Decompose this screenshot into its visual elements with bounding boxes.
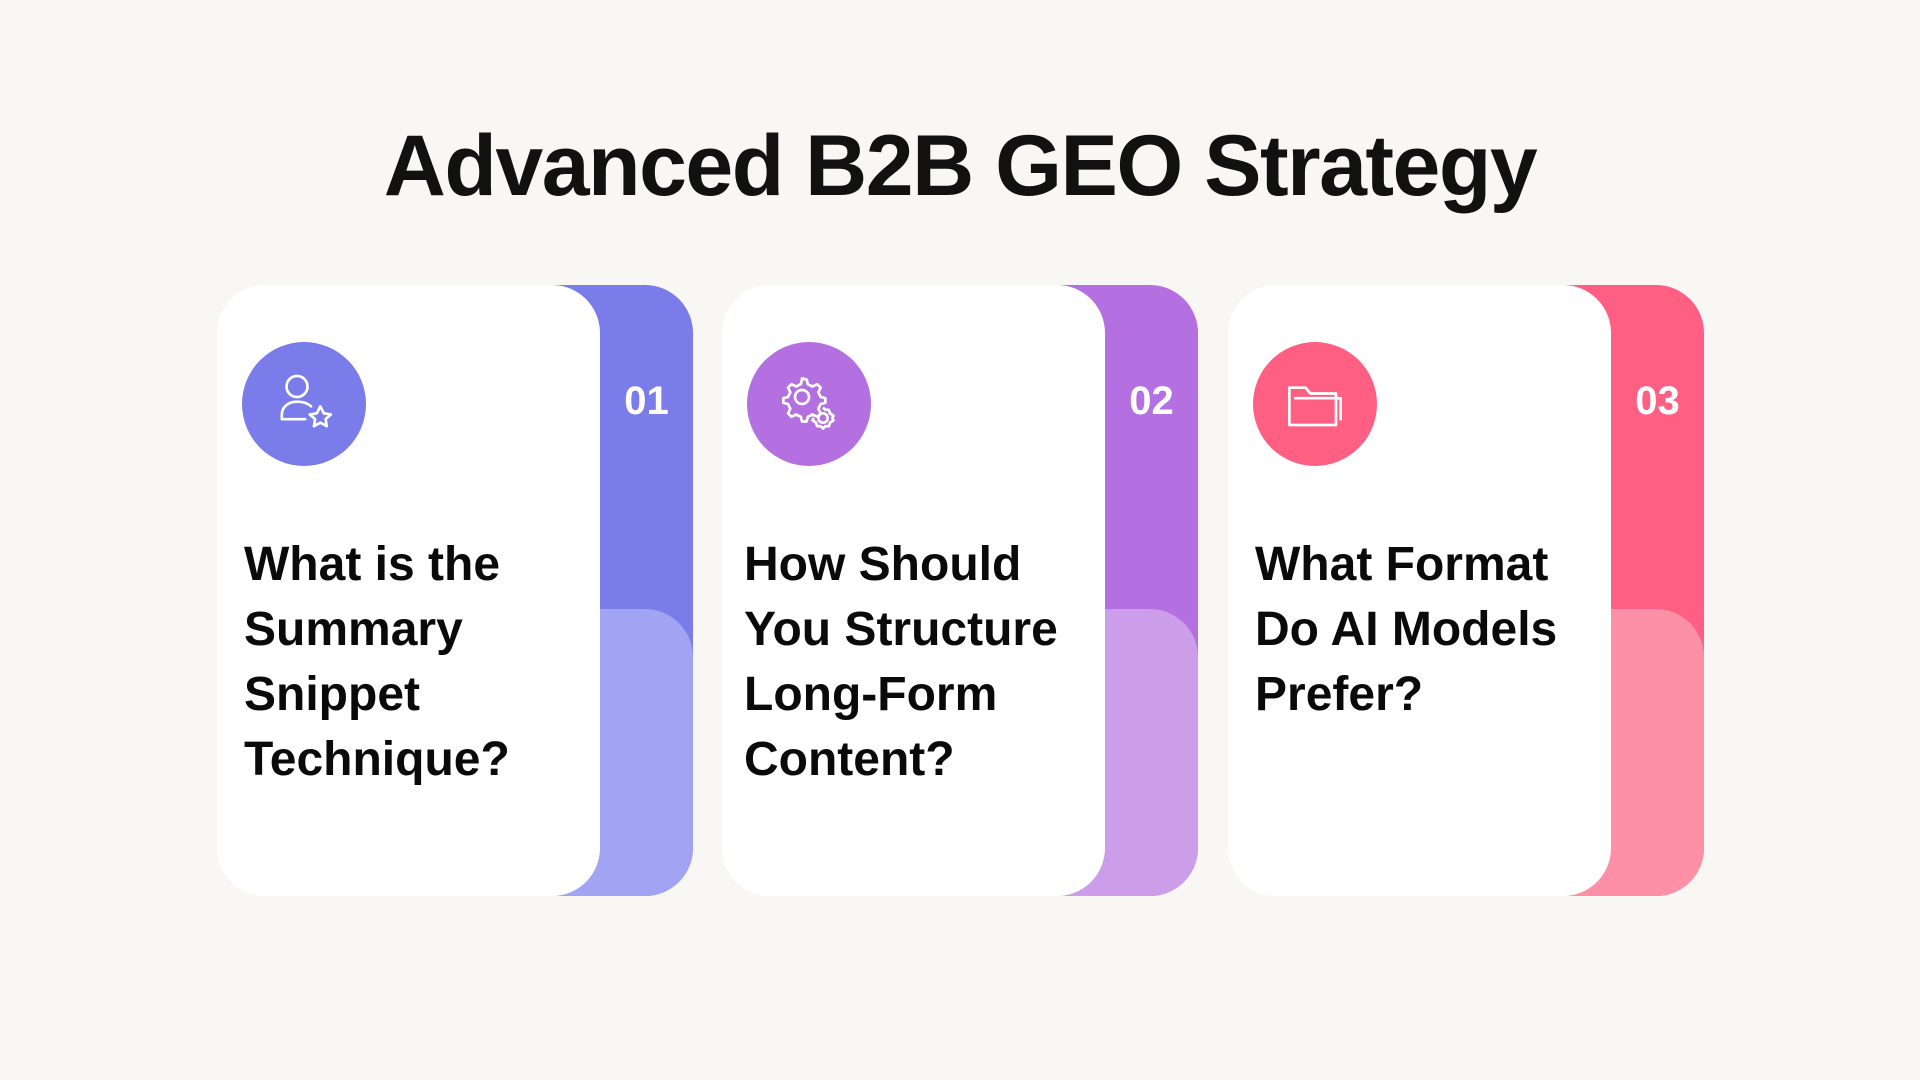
text: question 2: Content? xyxy=(744,733,955,786)
number 03: 03 xyxy=(1635,379,1680,423)
text: question 3: Do AI Models xyxy=(1255,603,1557,656)
text: question 2: How Should xyxy=(744,538,1021,591)
panel: card 01 xyxy=(217,285,693,896)
number 01: 01 xyxy=(624,379,669,423)
text: question 2: Long-Form xyxy=(744,668,997,721)
icon: folder xyxy=(1253,342,1377,466)
text: question 2 xyxy=(744,538,1058,786)
title: Advanced B2B GEO Strategy xyxy=(384,118,1536,214)
icon: user star xyxy=(242,342,366,466)
text: question 1: Summary xyxy=(244,603,463,656)
panel: card 02 xyxy=(722,285,1198,896)
text: question 2: You Structure xyxy=(744,603,1058,656)
text: question 3 xyxy=(1255,538,1557,721)
panel: card 03 xyxy=(1228,285,1704,896)
text: question 3: What Format xyxy=(1255,538,1548,591)
text: question 3: Prefer? xyxy=(1255,668,1423,721)
text: question 1: Technique? xyxy=(244,733,510,786)
icon: gears xyxy=(747,342,871,466)
text: question 1: Snippet xyxy=(244,668,420,721)
number 02: 02 xyxy=(1129,379,1174,423)
text: question 1 xyxy=(244,538,510,786)
text: question 1: What is the xyxy=(244,538,500,591)
